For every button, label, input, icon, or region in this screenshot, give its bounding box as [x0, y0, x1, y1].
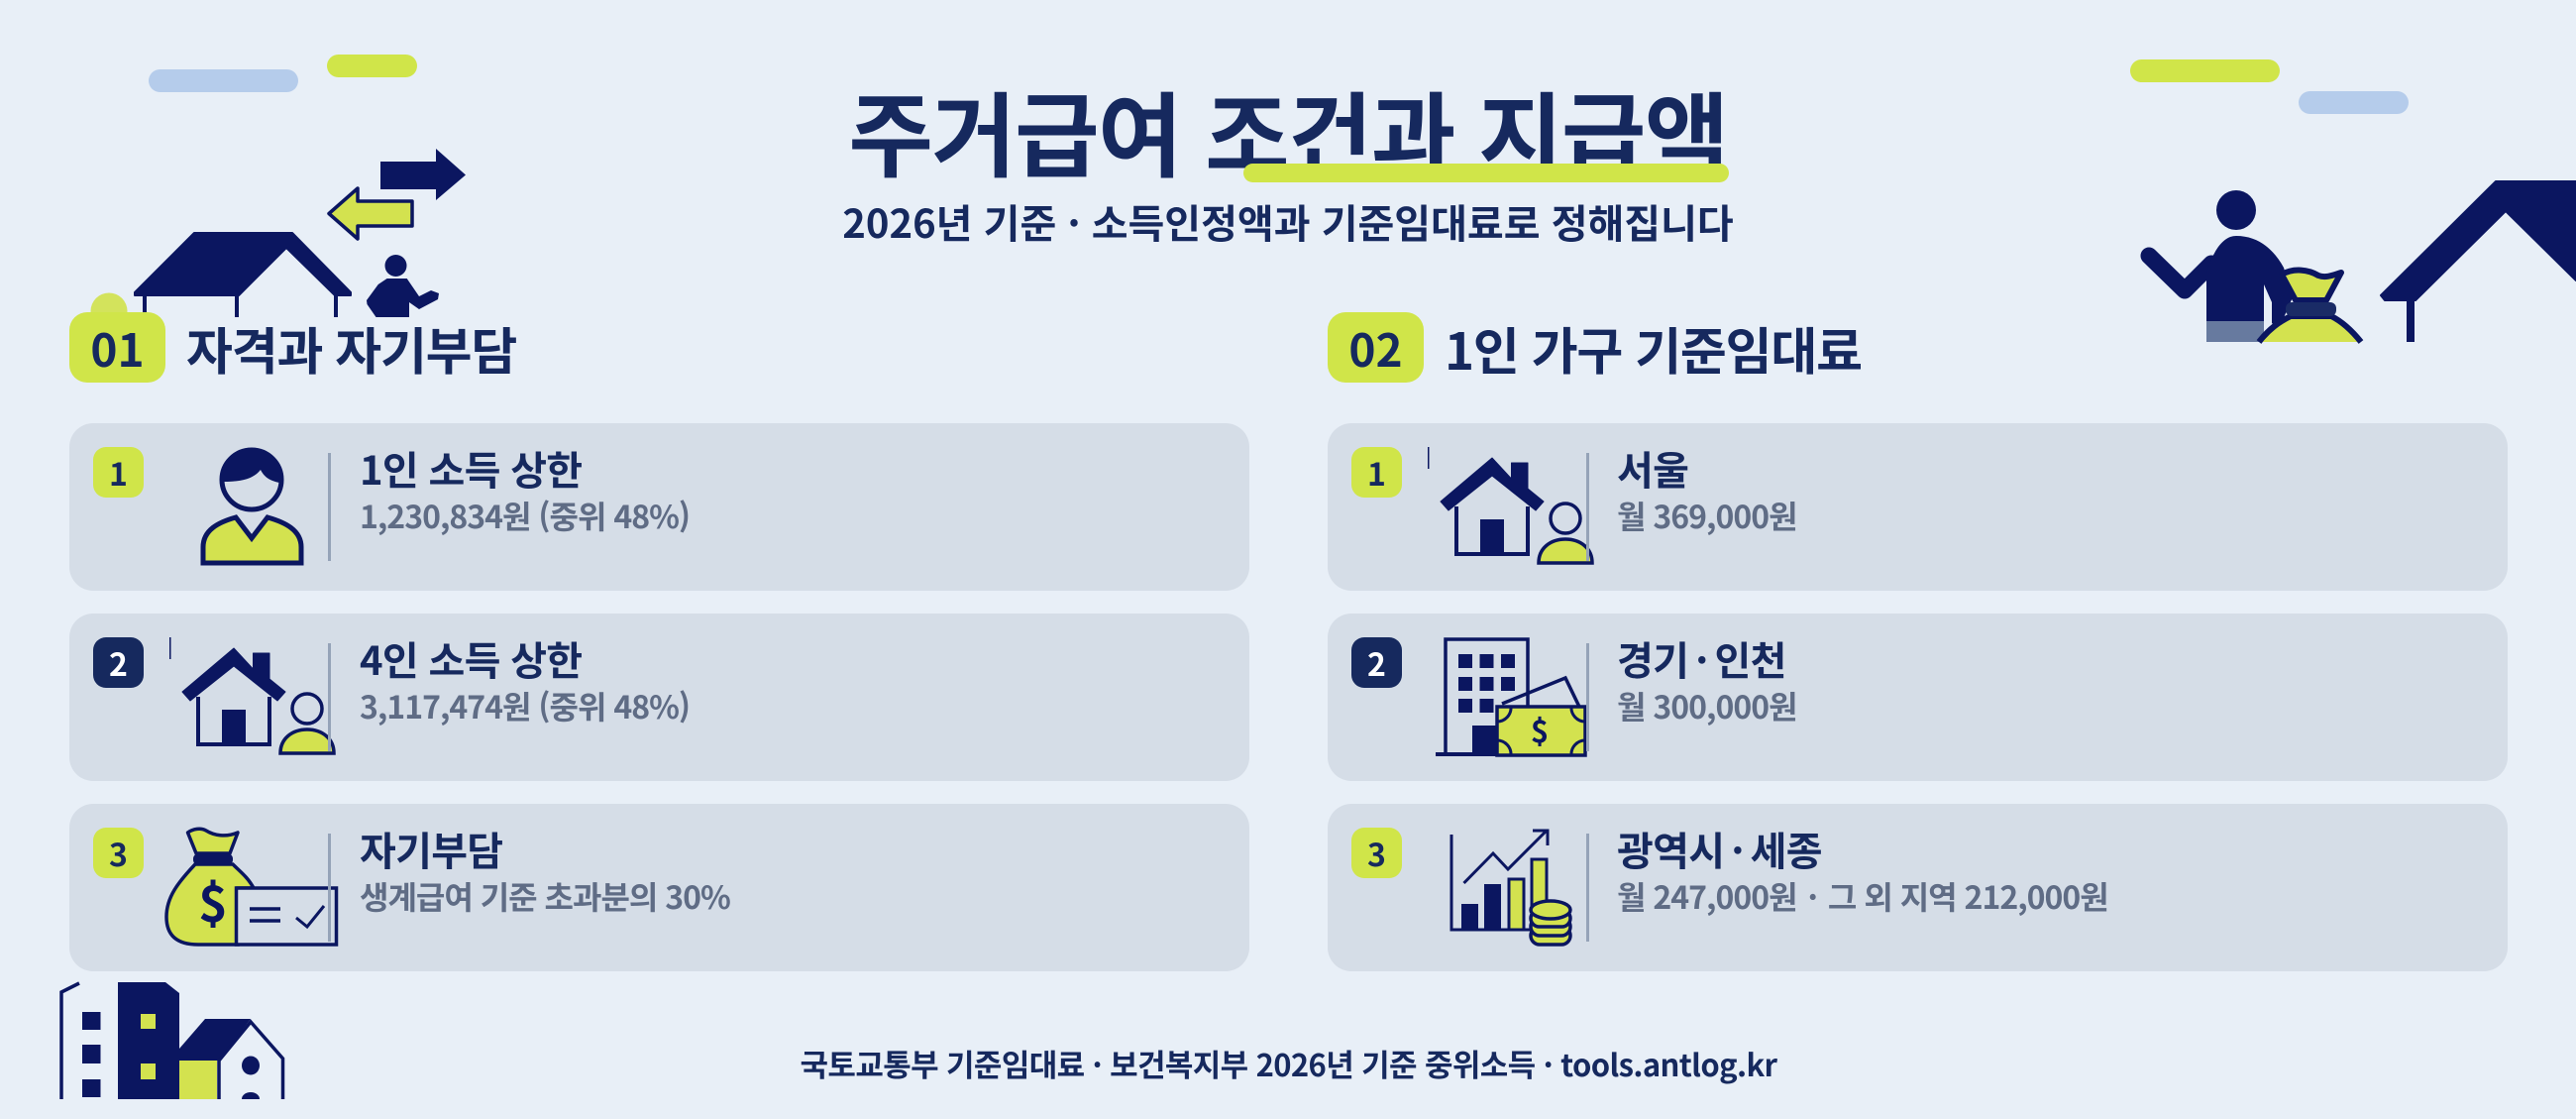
item title: 자기부담: [360, 820, 502, 877]
icon: money bag and check: $: [198, 865, 228, 937]
badge 3: [1351, 828, 1402, 878]
icon: house top left: [135, 233, 351, 317]
icon: money bag and check: [166, 829, 337, 945]
item value: 월 300,000원: [1617, 683, 1797, 728]
icon: building and banknote: [1436, 639, 1585, 756]
item title: 경기·인천: [1617, 629, 1786, 687]
divider: [1586, 643, 1589, 751]
icon: person: [203, 448, 301, 563]
badge number: 1: [1367, 450, 1386, 496]
divider: [328, 453, 331, 561]
decorative pills: top left: [149, 55, 417, 92]
section heading 01: [69, 293, 516, 385]
icon: house and person: [169, 637, 334, 753]
item title: 광역시·세종: [1617, 820, 1822, 877]
section number 02: 02: [1348, 315, 1403, 381]
illustration: city buildings bottom left: [61, 982, 283, 1099]
divider: [1586, 453, 1589, 561]
badge number: 1: [109, 450, 128, 496]
icon: building and banknote: $: [1531, 707, 1549, 751]
badge number: 3: [1367, 831, 1386, 876]
decorative pills: top right: [2130, 59, 2409, 114]
badge number: 3: [109, 831, 128, 876]
badge bump: [91, 293, 127, 329]
divider: [328, 643, 331, 751]
divider: [1586, 834, 1589, 942]
illustration: person with money bag and house top right: [2149, 181, 2576, 342]
icon: exchange arrows: [329, 149, 466, 239]
item value: 월 369,000원: [1617, 493, 1797, 538]
heading text: 자격과 자기부담: [186, 311, 516, 385]
item title: 1인 소득 상한: [360, 439, 582, 497]
panel: card 2 left: [69, 614, 1249, 781]
badge 3: [93, 828, 144, 878]
section number badge 02: [1328, 312, 1424, 383]
divider: [328, 834, 331, 942]
item value: 생계급여 기준 초과분의 30%: [360, 873, 730, 919]
icon: house and person: [1428, 447, 1592, 563]
heading text: 1인 가구 기준임대료: [1445, 311, 1862, 385]
section number badge 01: [69, 312, 165, 383]
icon: person top left: [367, 255, 439, 317]
panel: card 3 right: [1328, 804, 2508, 971]
item title: 서울: [1617, 439, 1688, 497]
badge number: 2: [109, 640, 128, 686]
badge 1: [93, 447, 144, 498]
item value: 월 247,000원 · 그 외 지역 212,000원: [1617, 873, 2108, 919]
item title: 4인 소득 상한: [360, 629, 582, 687]
badge 2: [1351, 637, 1402, 688]
panel: card 3 left: [69, 804, 1249, 971]
panel: card 2 right: [1328, 614, 2508, 781]
section number 01: 01: [90, 315, 145, 381]
item value: 3,117,474원 (중위 48%): [360, 683, 690, 728]
title: 주거급여 조건과 지급액: [848, 62, 1728, 196]
panel: card 1 right: [1328, 423, 2508, 591]
icon: chart and coins: [1451, 831, 1570, 945]
panel: card 1 left: [69, 423, 1249, 591]
item value: 1,230,834원 (중위 48%): [360, 493, 690, 538]
subtitle: 2026년 기준 · 소득인정액과 기준임대료로 정해집니다: [842, 192, 1734, 250]
badge 2: [93, 637, 144, 688]
badge 1: [1351, 447, 1402, 498]
section heading 02: [1328, 311, 1862, 385]
title underline: [1243, 164, 1729, 182]
badge number: 2: [1367, 640, 1386, 686]
footer source line: 국토교통부 기준임대료 · 보건복지부 2026년 기준 중위소득 · tools.antlog.kr: [801, 1041, 1778, 1085]
